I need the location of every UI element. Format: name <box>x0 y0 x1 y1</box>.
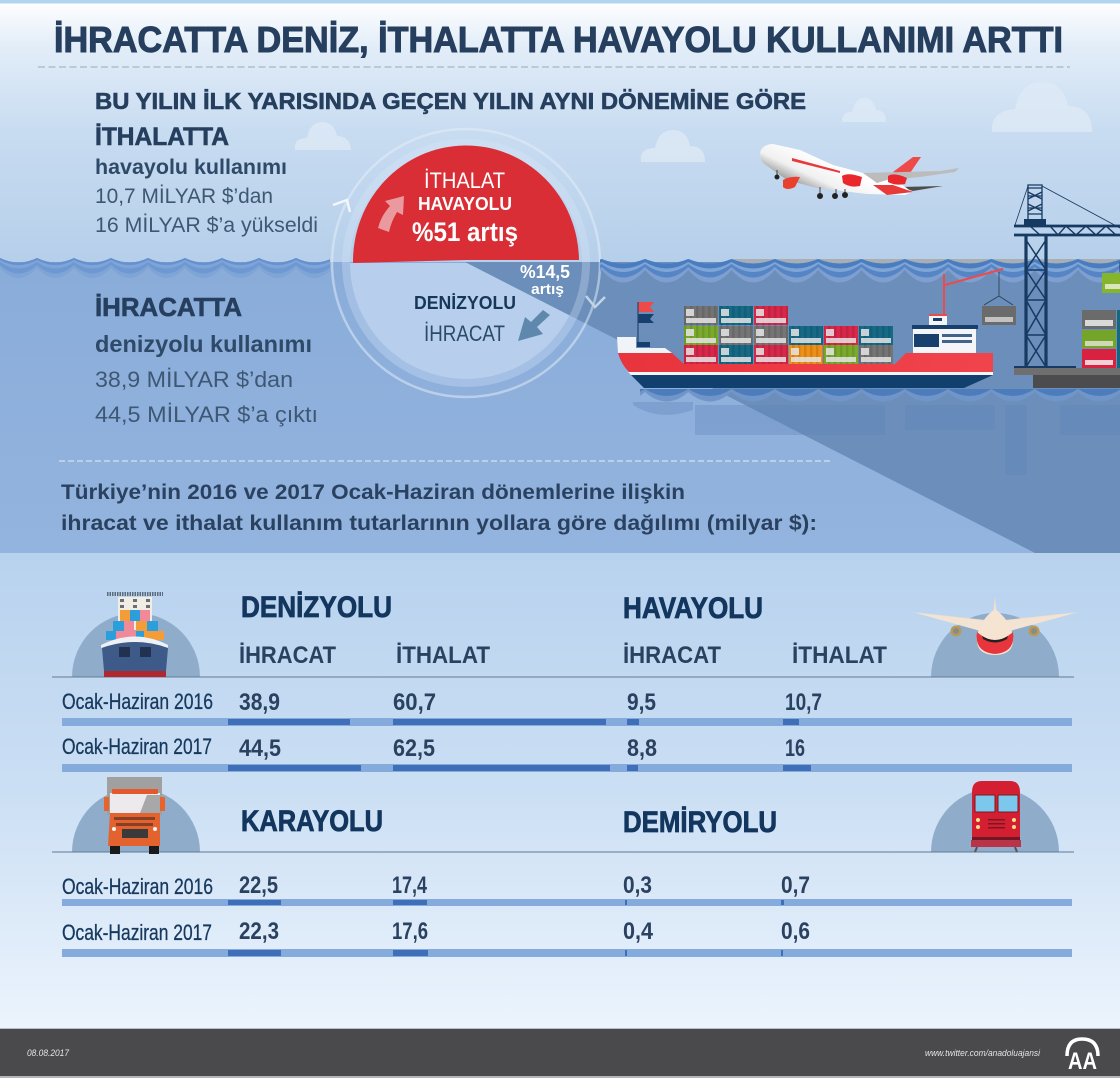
arrow down <box>518 310 550 341</box>
table headings: karayolu and demiryolu: DEMİRYOLU <box>623 806 777 839</box>
table row labels: Ocak-Haziran 2016 <box>62 689 213 714</box>
label: ihracat: İHRACAT <box>424 321 505 346</box>
table headings: denizyolu and havayolu: İHRACAT <box>623 642 721 669</box>
table values: 0,3 <box>623 872 652 899</box>
label: %51 artış: %51 artış <box>412 217 518 247</box>
cargo <box>684 306 893 364</box>
table rule lines <box>52 676 1074 678</box>
table headings: denizyolu and havayolu: DENİZYOLU <box>241 591 392 624</box>
denizyolu ihracat labels: %14,5 <box>520 262 570 282</box>
footer date: 08.08.2017 <box>27 1048 70 1058</box>
table headings: denizyolu and havayolu: İTHALAT <box>792 642 887 669</box>
label: havayolu: HAVAYOLU <box>418 194 512 214</box>
table values: 0,6 <box>781 918 810 945</box>
background: sky <box>0 0 1120 262</box>
icon: front airplane <box>912 597 1079 655</box>
label: ithalat: İTHALAT <box>424 168 505 193</box>
ship reflection <box>633 402 1120 475</box>
icon: truck <box>104 777 165 854</box>
table headings: denizyolu and havayolu <box>239 591 887 669</box>
red half disc: ithalat <box>353 145 579 263</box>
table headings: denizyolu and havayolu: İHRACAT <box>239 642 336 669</box>
horizon strip <box>733 259 1120 267</box>
arrow up <box>378 196 404 232</box>
table values: 22,5 <box>239 872 278 899</box>
table values: 22,3 <box>239 918 279 945</box>
title divider <box>38 66 1070 68</box>
denizyolu ihracat labels <box>414 262 570 346</box>
deck crane <box>944 269 1003 314</box>
table headings: denizyolu and havayolu: HAVAYOLU <box>623 592 763 625</box>
footer url: www.twitter.com/anadoluajansi <box>925 1048 1041 1058</box>
table headings: karayolu and demiryolu: KARAYOLU <box>241 805 383 838</box>
table values: 17,4 <box>392 872 427 899</box>
bow <box>617 337 672 353</box>
section intro text: ihracat ve ithalat kullanım tutarlarının yollara göre dağılımı (milyar $): <box>61 512 817 535</box>
text block: ithalatta <box>95 123 318 237</box>
table values: 44,5 <box>239 735 281 762</box>
icon: AA logo: AA <box>1068 1048 1097 1075</box>
text block: ithalatta: İTHALATTA <box>95 123 229 151</box>
circle graphic: base disc <box>350 263 582 379</box>
icon backdrops <box>72 613 1059 852</box>
text block: ihracatta: 44,5 MİLYAR $’a çıktı <box>95 402 318 427</box>
icon: AA logo <box>1067 1039 1098 1075</box>
text block: ithalatta: 16 MİLYAR $’a yükseldi <box>95 214 318 237</box>
text block: ihracatta: denizyolu kullanımı <box>95 331 312 357</box>
table values <box>239 689 822 945</box>
table row labels <box>62 689 213 945</box>
table row labels: Ocak-Haziran 2017 <box>62 920 212 945</box>
table values: 16 <box>785 735 805 762</box>
dock <box>1014 368 1120 388</box>
table values: 0,4 <box>623 918 654 945</box>
dashed divider <box>59 460 830 462</box>
icon: crane <box>1014 185 1120 369</box>
diagonal shadow <box>465 262 1120 553</box>
table values: 38,9 <box>239 689 280 716</box>
icon: clouds <box>295 82 1092 162</box>
footer bar <box>0 1028 1120 1078</box>
title: İHRACATTA DENİZ, İTHALATTA HAVAYOLU KULLANIMI ARTTI <box>54 19 1063 60</box>
label: denizyolu: DENİZYOLU <box>414 293 516 313</box>
label: artış: artış <box>531 281 564 298</box>
icon: airplane <box>760 144 959 199</box>
flag <box>638 302 654 312</box>
table values: 60,7 <box>393 689 436 716</box>
waves <box>0 258 1120 405</box>
superstructure <box>913 328 976 353</box>
table: value bars <box>228 719 811 956</box>
icon: train <box>971 781 1021 852</box>
table values: 8,8 <box>627 735 657 762</box>
background: sea <box>0 262 1120 553</box>
text block: ithalatta: 10,7 MİLYAR $’dan <box>95 185 273 208</box>
text block: ihracatta: İHRACATTA <box>95 292 242 322</box>
table values: 62,5 <box>393 735 435 762</box>
table row labels: Ocak-Haziran 2016 <box>62 874 213 899</box>
table headings: karayolu and demiryolu <box>241 805 777 839</box>
background: lower table area <box>0 553 1120 1029</box>
table values: 0,7 <box>781 872 810 899</box>
section intro text: Türkiye’nin 2016 ve 2017 Ocak-Haziran dönemlerine ilişkin <box>61 481 685 504</box>
table values: 9,5 <box>627 689 656 716</box>
table values: 10,7 <box>785 689 822 716</box>
text block: ihracatta <box>95 292 318 427</box>
hull red <box>618 353 993 372</box>
container ship <box>617 269 1003 388</box>
icon: front ship <box>101 594 168 677</box>
table values: 17,6 <box>392 918 428 945</box>
circle graphic: rings <box>332 129 605 397</box>
text block: ihracatta: 38,9 MİLYAR $’dan <box>95 367 293 392</box>
subtitle: BU YILIN İLK YARISINDA GEÇEN YILIN AYNI DÖNEMİNE GÖRE <box>95 88 806 114</box>
table headings: denizyolu and havayolu: İTHALAT <box>396 642 490 669</box>
table: track bars <box>62 718 1072 957</box>
section intro text <box>61 481 817 535</box>
containers: right stack and hanging <box>982 262 1120 368</box>
text block: ithalatta: havayolu kullanımı <box>95 156 287 179</box>
table row labels: Ocak-Haziran 2017 <box>62 734 212 759</box>
